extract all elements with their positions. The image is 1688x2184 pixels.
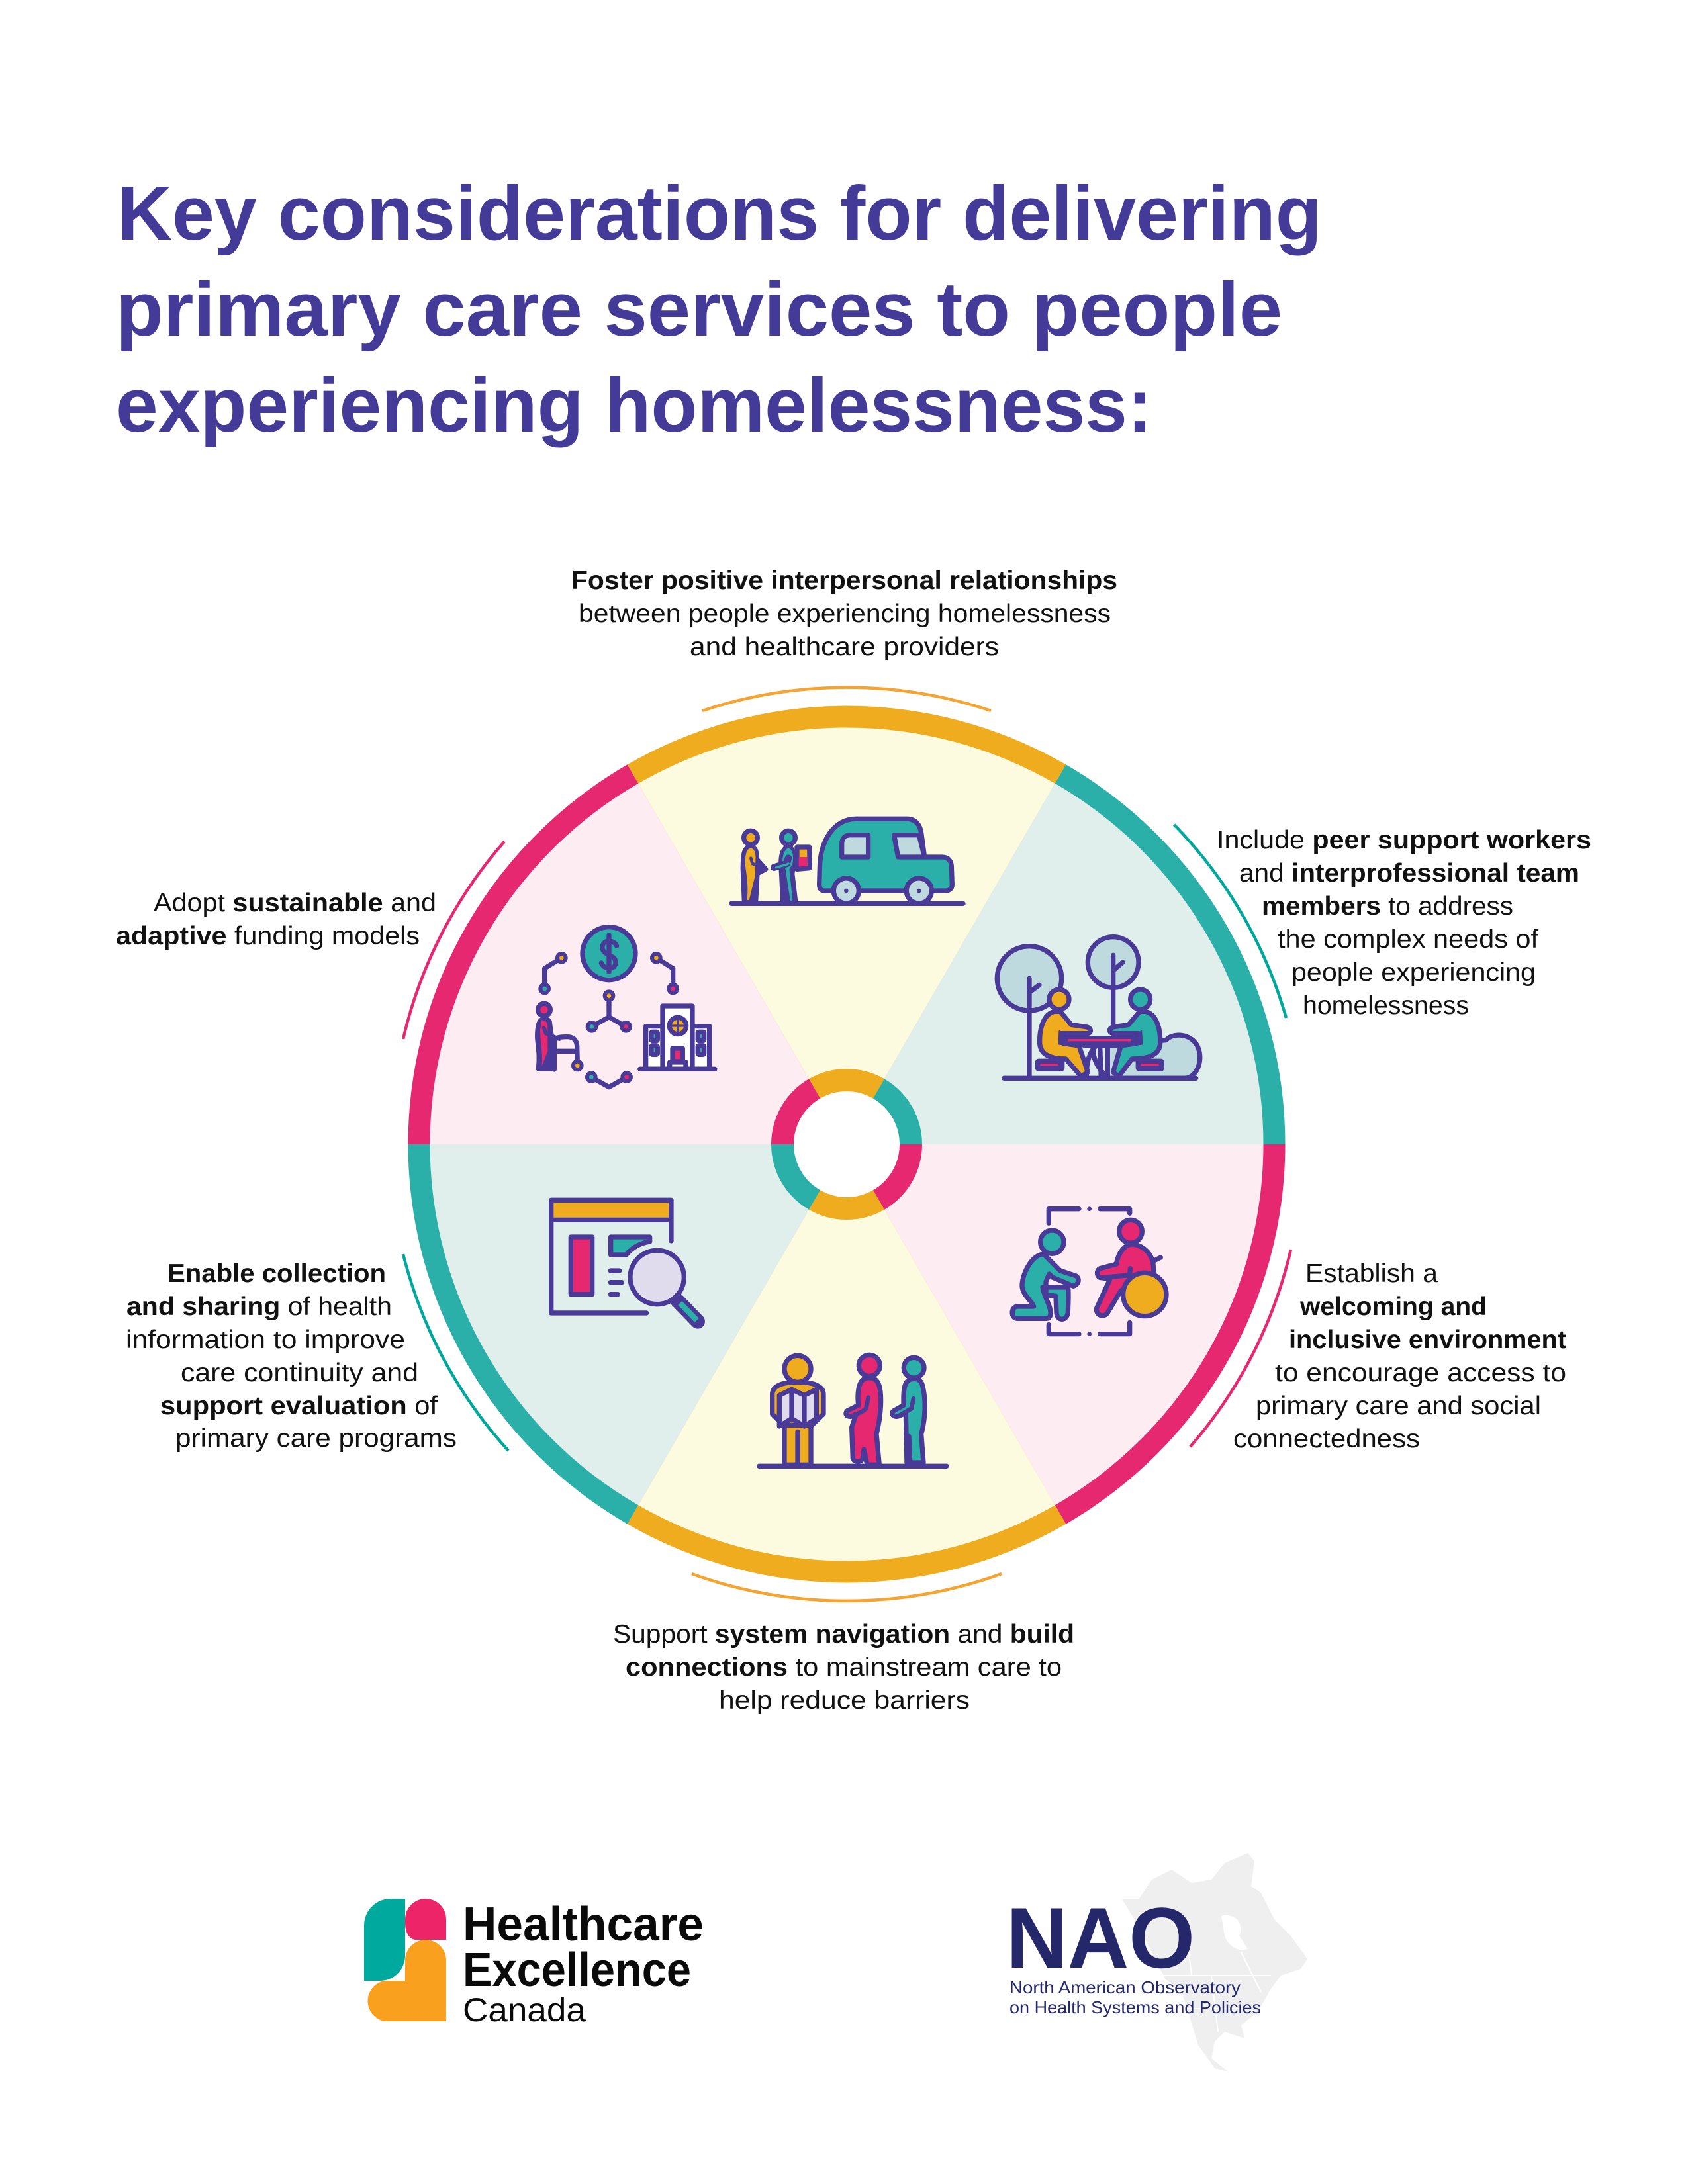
- outer accent arcs: [403, 688, 1291, 1601]
- logo: Healthcare Excellence Canada: Excellence: [463, 1944, 691, 1997]
- text: system navigation: help reduce barriers: [719, 1686, 970, 1715]
- text: welcoming environment: Establish a: [1305, 1259, 1438, 1288]
- title: Key considerations for delivering: [117, 170, 1322, 256]
- icon: funding network: [538, 927, 715, 1087]
- text: welcoming environment: inclusive environment: [1289, 1326, 1566, 1354]
- title: experiencing homelessness:: [116, 362, 1152, 448]
- text: welcoming environment: primary care and social: [1256, 1392, 1541, 1420]
- text: sustainable funding: [116, 889, 436, 950]
- title: primary care services to people: [116, 266, 1282, 352]
- icon: people beside outreach van: [731, 819, 963, 903]
- icon: three people reading a map: [759, 1355, 947, 1466]
- icon: carer kneeling beside wheelchair user: [1012, 1206, 1166, 1336]
- logo: Healthcare Excellence Canada: Canada: [463, 1991, 586, 2028]
- text: system navigation: Support system navigation and build: [613, 1620, 1074, 1649]
- text: peer support workers: the complex needs of: [1278, 925, 1538, 954]
- logo: North American Observatory: North American Observatory: [1009, 1978, 1241, 1997]
- text: data collection and sharing: [126, 1259, 457, 1453]
- logo: North American Observatory: NAO: [1006, 1889, 1195, 1986]
- title: [116, 170, 1322, 448]
- text: system navigation: connections to mainstream care to: [626, 1653, 1062, 1682]
- logo: Healthcare Excellence Canada: Healthcare: [463, 1898, 704, 1951]
- text: peer support workers: homelessness: [1303, 991, 1469, 1020]
- text: data collection and sharing: information to improve: [126, 1326, 405, 1354]
- text: peer support workers: people experiencing: [1291, 958, 1536, 987]
- text: foster relationships: and healthcare providers: [690, 633, 999, 661]
- text: foster relationships: [571, 567, 1117, 661]
- logo: Healthcare Excellence Canada: [364, 1898, 704, 2028]
- text: welcoming environment: welcoming and: [1299, 1293, 1487, 1321]
- text: welcoming environment: to encourage access to: [1275, 1359, 1566, 1387]
- text: peer support workers: members to address: [1262, 892, 1513, 921]
- text: foster relationships: between people experiencing homelessness: [579, 600, 1111, 628]
- wheel diagram: [408, 706, 1286, 1582]
- text: welcoming environment: [1233, 1259, 1566, 1453]
- text: data collection and sharing: care continuity and: [181, 1359, 418, 1387]
- logo: North American Observatory: on Health Systems and Policies: [1009, 1997, 1261, 2017]
- icon: two people at a park table: [997, 937, 1200, 1078]
- text: sustainable funding: Adopt sustainable and: [154, 889, 436, 917]
- text: sustainable funding: adaptive funding models: [116, 922, 420, 950]
- text: data collection and sharing: primary care programs: [175, 1424, 457, 1453]
- text: peer support workers: [1217, 826, 1591, 1020]
- text: foster relationships: Foster positive interpersonal relationships: [571, 567, 1117, 595]
- text: data collection and sharing: and sharing of health: [126, 1293, 392, 1321]
- text: peer support workers: and interprofessional team: [1239, 859, 1579, 887]
- logo: North American Observatory: [1006, 1853, 1307, 2071]
- text: data collection and sharing: Enable collection: [167, 1259, 386, 1288]
- text: data collection and sharing: support evaluation of: [160, 1392, 438, 1420]
- text: welcoming environment: connectedness: [1233, 1425, 1420, 1453]
- text: system navigation: [613, 1620, 1074, 1715]
- icon: health data window with magnifier: [551, 1200, 698, 1322]
- text: peer support workers: Include peer support workers: [1217, 826, 1591, 854]
